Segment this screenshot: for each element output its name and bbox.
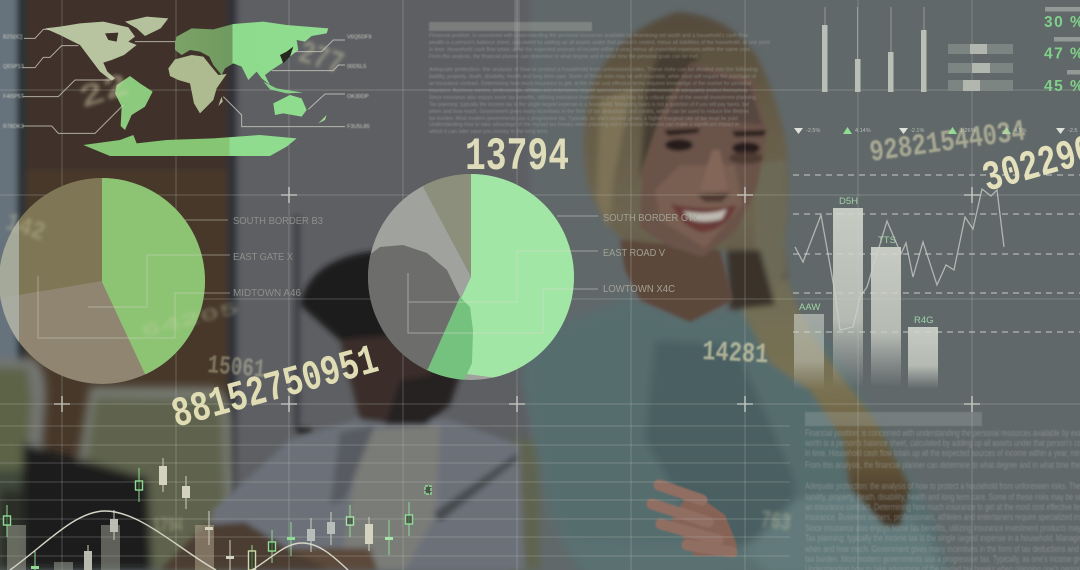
- text block top: [428, 22, 770, 135]
- paragraphs: [804, 428, 1080, 570]
- pie labels: [233, 215, 323, 299]
- paragraphs: insurance. Business owners, professionals, athletes and entertainers require specialized insurance professionals to adequately protect themselves.: [429, 88, 749, 94]
- paragraphs: From this analysis, the financial planner can determine to what degree and in what time the personal goals can be met.: [429, 54, 699, 60]
- number: 92821544034: 92821544034: [868, 115, 1028, 171]
- map labels: OK30DP: [347, 94, 369, 100]
- map labels: Q6SP13: [3, 64, 24, 70]
- bar TTS: [871, 235, 901, 387]
- ticker row with triangles: -2.1%: [910, 128, 924, 134]
- pie chart left: [0, 178, 322, 384]
- text block lower right: [804, 412, 1080, 570]
- number: 15061: 15061: [206, 350, 267, 385]
- paragraphs: liability, property, death, disability, health and long term care. Some of these risks may be self-insurable, while most will require the purchase of: [429, 74, 756, 80]
- dashed guide lines: [793, 175, 1080, 332]
- paragraphs: wealth is a person's balance sheet, calculated by adding up all assets under that person's control, minus all liabilities of the household, at one point: [428, 40, 770, 46]
- photo: seated person: [160, 250, 525, 570]
- paragraphs: an insurance contract. Determining how much insurance to get, at the most cost effective terms requires knowledge of the market for personal: [429, 81, 751, 87]
- candlestick chart bottom left: [4, 458, 431, 570]
- pie labels: SOUTH BORDER GW: [603, 212, 697, 224]
- paragraphs: in time. Household cash flow totals up all the expected sources of income within a year, minus all expected expenses within the same year.: [429, 47, 751, 53]
- number: 14281: 14281: [702, 337, 769, 371]
- background bars: [7, 525, 214, 570]
- bar D5H: D5H: [839, 196, 858, 207]
- photo: woman with long hair: [520, 12, 950, 570]
- pie slices: [0, 178, 205, 384]
- pie labels: MIDTOWN A46: [233, 287, 301, 299]
- filled candles: [31, 466, 393, 570]
- paragraphs: Financial position: is concerned with understanding the personal resources available by examining net worth and a household's cash flow.: [429, 33, 749, 39]
- sharp number: 13794: 13794: [465, 131, 569, 183]
- bar R4G: R4G: [914, 315, 934, 326]
- paragraphs: which it can later save you money in the long term.: [428, 129, 549, 135]
- face: [620, 63, 767, 322]
- paragraphs: Understanding how to take advantage of the myriad tax breaks when planning one's personal finances can make a significant impact in: [429, 122, 739, 128]
- paragraphs: [428, 33, 770, 135]
- candlestick mini chart top right: [822, 7, 926, 92]
- map leader lines: [23, 29, 345, 133]
- paragraphs: when and how much. Government gives many incentives in the form of tax deductions and credits, which can be used to reduce the lifetime: [428, 109, 750, 115]
- map labels: V6Q5DF9: [347, 34, 371, 40]
- map labels: F3U5L85: [347, 124, 370, 130]
- bar TTS: TTS: [878, 235, 896, 246]
- wicks: [7, 458, 409, 570]
- pie slices: [368, 174, 574, 380]
- pie leader lines: [408, 216, 598, 333]
- ticker row with triangles: 4.14%: [855, 128, 871, 134]
- pie chart center: [360, 170, 697, 390]
- number: 763: 763: [759, 507, 792, 538]
- blouse: [520, 300, 950, 570]
- map labels: 00D5L5: [347, 64, 366, 70]
- number: 22: 22: [75, 67, 134, 118]
- ticker row with triangles: 1.26%: [960, 128, 976, 134]
- bar R4G: [908, 315, 938, 389]
- ticker row with triangles: -2.5: [1068, 128, 1077, 134]
- pie labels: EAST GATE X: [233, 251, 293, 263]
- number: 277: 277: [294, 34, 348, 83]
- pie labels: SOUTH BORDER B3: [233, 215, 323, 227]
- line chart: [795, 189, 1004, 330]
- hand: [652, 485, 737, 556]
- pie labels: LOWTOWN X4C: [603, 283, 675, 295]
- hair: [584, 12, 910, 525]
- number: 1794: 1794: [153, 515, 183, 538]
- paragraphs: Adequate protection: the analysis of how to protect a household from unforeseen risks. These risks can be divided into the following:: [429, 67, 759, 73]
- trend curves: [10, 511, 348, 570]
- pie leader lines: [38, 220, 230, 338]
- percentage stats: [1044, 7, 1080, 95]
- sharp number: 88152750951: 88152750951: [167, 337, 384, 440]
- map continents: [23, 17, 345, 156]
- map labels: F4I5P5T: [3, 94, 25, 100]
- paragraphs: tax burden. Most modern governments use a progressive tax. Typically, as one's income grows, a higher marginal rate of tax must be paid.: [429, 116, 739, 122]
- photo: chairs and laptop: [0, 358, 540, 570]
- pie labels: EAST ROAD V: [603, 247, 665, 259]
- plus markers: [54, 187, 980, 412]
- bar D5H: [833, 196, 863, 388]
- heading bar: [429, 22, 592, 31]
- map labels: [3, 34, 371, 130]
- number: 142: 142: [2, 207, 49, 248]
- paragraphs: Tax planning: typically the income tax is the single largest expense in a household. Managing taxes is not a question of if you will pay taxes, but: [429, 102, 749, 108]
- world map with callouts: [3, 17, 371, 156]
- ticker row with triangles: [794, 127, 1077, 134]
- map labels: R78DK3: [3, 124, 24, 130]
- bar AAW: [794, 302, 824, 390]
- paragraphs: Since insurance also enjoys some tax benefits, utilizing insurance investment products may be a critical piece of the overall investment planning.: [429, 95, 757, 101]
- ticker row with triangles: -2.5%: [806, 128, 820, 134]
- bar AAW: AAW: [799, 302, 820, 313]
- ticker row with triangles: 4.5%: [1014, 128, 1027, 134]
- heading bar: [805, 412, 982, 426]
- pie labels: [603, 212, 697, 295]
- map labels: B2S(IC]: [3, 34, 23, 40]
- horizontal range bars: [948, 44, 1013, 91]
- number: long blurred figure: 64205: [140, 299, 241, 343]
- hollow candles: [4, 481, 431, 570]
- bar chart: [794, 196, 938, 390]
